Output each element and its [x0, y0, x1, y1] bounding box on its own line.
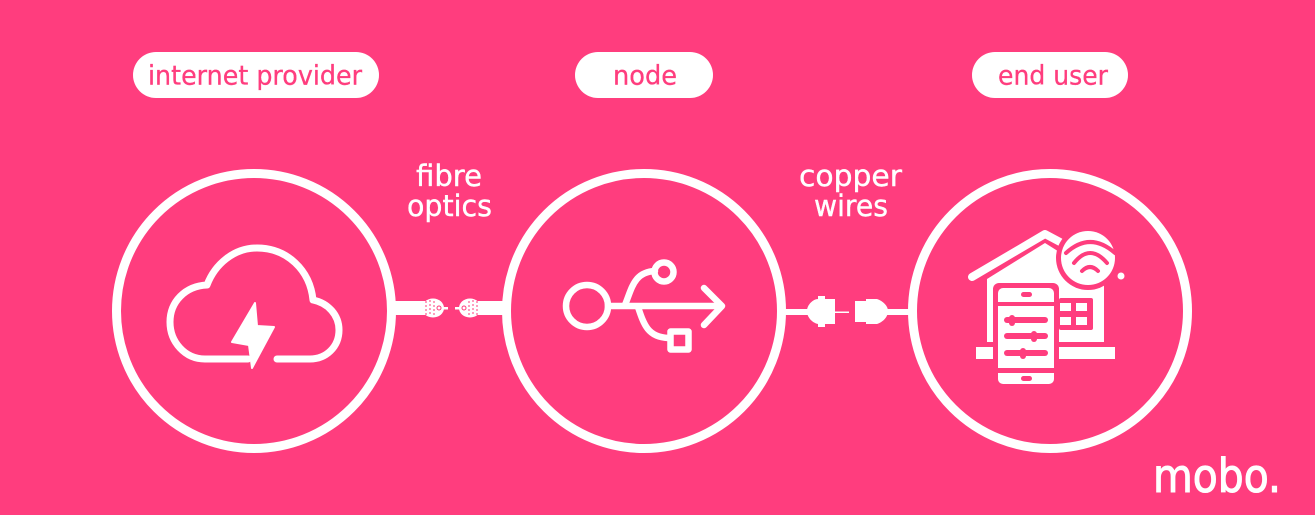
smartphone	[993, 283, 1059, 390]
connector: fibre optics cable	[395, 298, 504, 318]
logo: mobo: mobo.	[1153, 450, 1281, 504]
circle: internet provider	[116, 174, 392, 448]
label: copper wires	[799, 159, 903, 223]
connector: copper wire plugs	[784, 296, 910, 327]
label: end user	[972, 52, 1128, 98]
label: node: node	[613, 60, 677, 92]
label: internet provider: internet provider	[148, 60, 362, 92]
icon: smart home	[972, 226, 1124, 390]
icon: usb symbol	[566, 262, 722, 350]
label: node	[575, 52, 713, 98]
window	[1059, 298, 1093, 330]
label: internet provider	[133, 52, 379, 98]
label: copper wires: wires	[814, 189, 888, 223]
icon: cloud with lightning bolt	[170, 248, 339, 368]
label: copper wires: copper	[799, 159, 903, 193]
circle: node	[506, 174, 782, 448]
label: fibre optics: fibre	[416, 159, 482, 193]
wifi badge	[1056, 226, 1124, 290]
label: end user: end user	[998, 60, 1108, 92]
circle: end user	[912, 174, 1188, 448]
label: fibre optics	[407, 159, 492, 223]
label: fibre optics: optics	[407, 189, 492, 223]
